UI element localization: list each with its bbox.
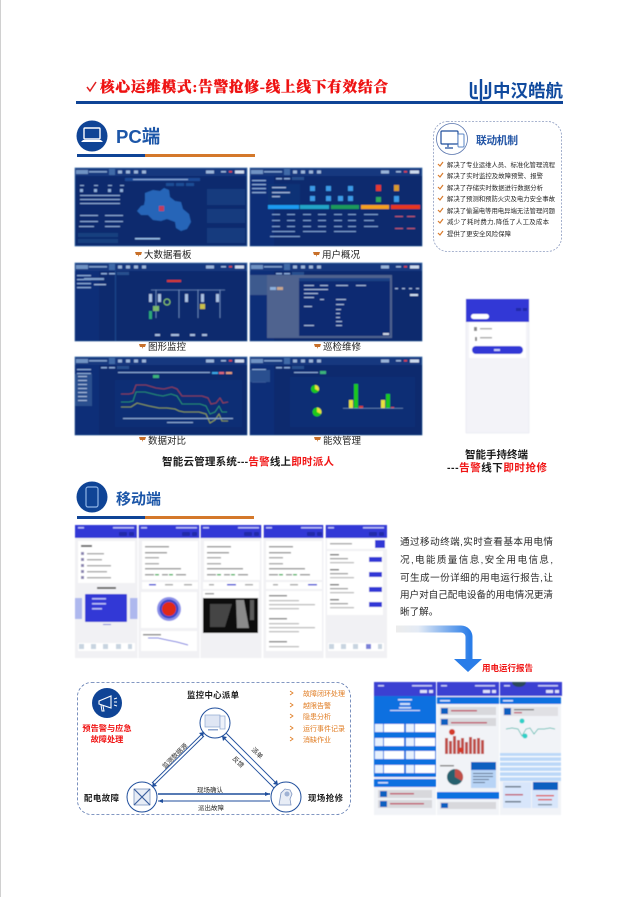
arrow labels: 现场确认 bbox=[197, 785, 224, 794]
icon: laptop bbox=[76, 120, 108, 152]
heading: 移动端: 移动端 bbox=[116, 491, 161, 508]
screenshot: 图形监控 bbox=[75, 263, 247, 341]
arrow labels bbox=[160, 741, 265, 812]
orange list: 越限告警 bbox=[303, 701, 331, 710]
label: 巡检维修 bbox=[323, 341, 362, 353]
panel heading: 联动机制 bbox=[476, 133, 518, 147]
label: 用户概况 bbox=[322, 249, 361, 261]
panel: 联动机制: 解决了预测和预防火灾及电力安全事故 bbox=[447, 194, 556, 203]
description text: 通过移动终端,实时查看基本用电情 bbox=[400, 536, 553, 548]
node heading: 监控中心派单: 监控中心派单 bbox=[187, 690, 239, 700]
mobile screens bbox=[75, 525, 387, 658]
caption: handheld: ---告警线下即时抢修 bbox=[447, 461, 548, 474]
label: 图形监控 bbox=[148, 341, 187, 353]
orange list: 故障闭环处理 bbox=[303, 689, 345, 698]
icon: monitor and phone bbox=[436, 124, 468, 154]
heading: PC端 bbox=[76, 120, 255, 157]
description text: 况,电能质量信息,安全用电信息, bbox=[400, 554, 553, 566]
arrow labels: 反馈 bbox=[231, 754, 246, 770]
phone: login screen bbox=[466, 299, 529, 433]
red label: 预告警与应急 bbox=[82, 723, 132, 733]
label: 用电运行报告: 用电运行报告 bbox=[482, 663, 533, 673]
phone 4 bbox=[263, 525, 325, 651]
panel: 联动机制: 解决了存储实时数据进行数据分析 bbox=[447, 183, 544, 192]
panel: 联动机制 bbox=[434, 122, 562, 252]
panel: 联动机制: 减少了耗时费力,降低了人工及成本 bbox=[447, 217, 550, 226]
report screens bbox=[374, 682, 562, 815]
phone 3 bbox=[200, 525, 262, 633]
screenshot: 数据对比 bbox=[75, 357, 247, 435]
node label: 配电故障: 配电故障 bbox=[84, 793, 120, 803]
panel: 联动机制: 提供了更安全风险保障 bbox=[447, 229, 512, 238]
caption: handheld: 智能手持终端 bbox=[465, 448, 528, 461]
icon: megaphone bbox=[92, 688, 122, 718]
orange list: 隐患分析 bbox=[303, 712, 331, 721]
report phone 1 bbox=[374, 682, 436, 815]
label: 能效管理 bbox=[323, 435, 362, 447]
title: 核心运维模式:告警抢修-线上线下有效结合 bbox=[100, 78, 388, 96]
heading: 移动端 bbox=[76, 482, 254, 519]
arrow labels: 派出故障 bbox=[198, 803, 224, 812]
phone 2 bbox=[138, 525, 200, 651]
logo bbox=[471, 79, 563, 101]
panel: dispatch diagram bbox=[78, 682, 350, 814]
description text: 用户对自己配电设备的用电情况更清 bbox=[400, 589, 553, 601]
description text bbox=[400, 536, 553, 618]
arrow: to report bbox=[396, 629, 482, 672]
node: fault bbox=[127, 782, 157, 812]
phone 1 bbox=[75, 525, 138, 651]
label: 大数据看板 bbox=[144, 249, 192, 261]
arrow labels: 派单 bbox=[250, 745, 265, 761]
caption: handheld bbox=[447, 448, 548, 474]
map bbox=[137, 188, 191, 231]
heading: PC端: PC端 bbox=[116, 126, 160, 147]
orange list bbox=[290, 689, 345, 744]
panel: 联动机制: 解决了偷漏电等用电异端无法管理问题 bbox=[447, 206, 556, 215]
node: on-site bbox=[271, 782, 301, 812]
red label bbox=[82, 723, 132, 744]
report phone 2 bbox=[437, 682, 499, 815]
panel: 联动机制: 解决了实时监控及故障预警、报警 bbox=[447, 171, 544, 180]
node: monitoring center bbox=[200, 708, 230, 738]
node label: 现场抢修: 现场抢修 bbox=[308, 793, 344, 803]
screenshot: 大数据看板 bbox=[75, 168, 247, 246]
orange list: 运行事件记录 bbox=[303, 724, 345, 733]
orange list: 消缺作业 bbox=[303, 735, 331, 744]
screenshot: 巡检维修 bbox=[250, 263, 422, 341]
screenshot: 用户概况 bbox=[250, 168, 422, 246]
panel: 联动机制: 解决了专业运维人员、标准化管理流程 bbox=[447, 160, 556, 169]
caption: PC: 智能云管理系统---告警线上即时派人 bbox=[162, 455, 334, 468]
arrows bbox=[152, 732, 278, 803]
arrow labels: 监测数据源 bbox=[160, 741, 190, 770]
description text: 可生成一份详细的用电运行报告,让 bbox=[400, 572, 553, 584]
red label: 故障处理 bbox=[91, 734, 123, 744]
icon: phone bbox=[76, 482, 108, 512]
phone 5 bbox=[325, 525, 387, 651]
screenshot: 能效管理 bbox=[250, 357, 422, 435]
description text: 晰了解。 bbox=[400, 606, 438, 618]
report phone 3 bbox=[500, 682, 562, 815]
label: 数据对比 bbox=[148, 435, 186, 447]
logo: 中汉皓航 bbox=[493, 81, 563, 101]
header rule bbox=[76, 101, 563, 104]
